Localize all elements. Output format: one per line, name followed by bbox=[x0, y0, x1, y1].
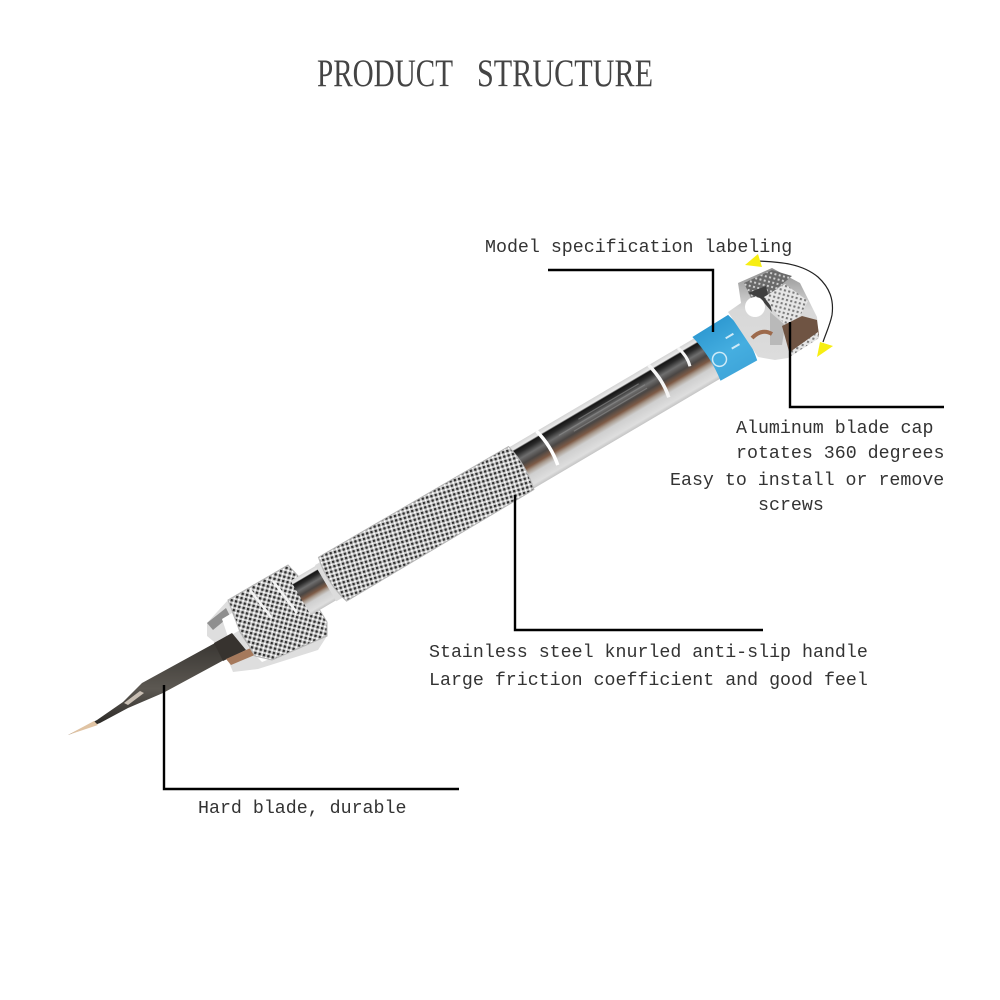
title bbox=[317, 52, 653, 95]
label: aluminum blade cap: rotates 360 degrees bbox=[736, 444, 944, 464]
title: PRODUCT bbox=[317, 52, 453, 95]
blade bbox=[68, 643, 224, 735]
shaft mottling bbox=[557, 381, 647, 439]
label: knurled handle: Stainless steel knurled anti-slip handle bbox=[429, 643, 868, 663]
connecting neck bbox=[290, 560, 346, 616]
label: aluminum blade cap: Aluminum blade cap bbox=[736, 419, 933, 439]
label: aluminum blade cap: Easy to install or remove bbox=[670, 471, 944, 491]
shaft rings bbox=[537, 347, 700, 466]
icon: yellow arrowhead top bbox=[745, 254, 762, 267]
label: hard blade: Hard blade, durable bbox=[198, 799, 406, 819]
aluminum blade cap bbox=[728, 268, 819, 360]
knurled handle bbox=[316, 444, 537, 603]
lower collar bbox=[207, 565, 327, 672]
title: STRUCTURE bbox=[477, 52, 653, 95]
icon: yellow arrowhead bottom bbox=[817, 342, 833, 357]
label: aluminum blade cap bbox=[670, 322, 944, 516]
label: aluminum blade cap: screws bbox=[758, 496, 824, 516]
label: knurled handle bbox=[429, 495, 868, 691]
label: model specification bbox=[485, 238, 792, 332]
label: hard blade bbox=[164, 685, 459, 819]
polished shaft bbox=[504, 336, 722, 492]
rotation arrow bbox=[745, 254, 833, 357]
label: model specification: Model specification labeling bbox=[485, 238, 792, 258]
blue model band bbox=[692, 313, 759, 383]
screwdriver product illustration bbox=[68, 268, 819, 735]
label: knurled handle: Large friction coefficient and good feel bbox=[429, 671, 868, 691]
polished shaft, handle, and band in axis frame bbox=[287, 313, 759, 621]
